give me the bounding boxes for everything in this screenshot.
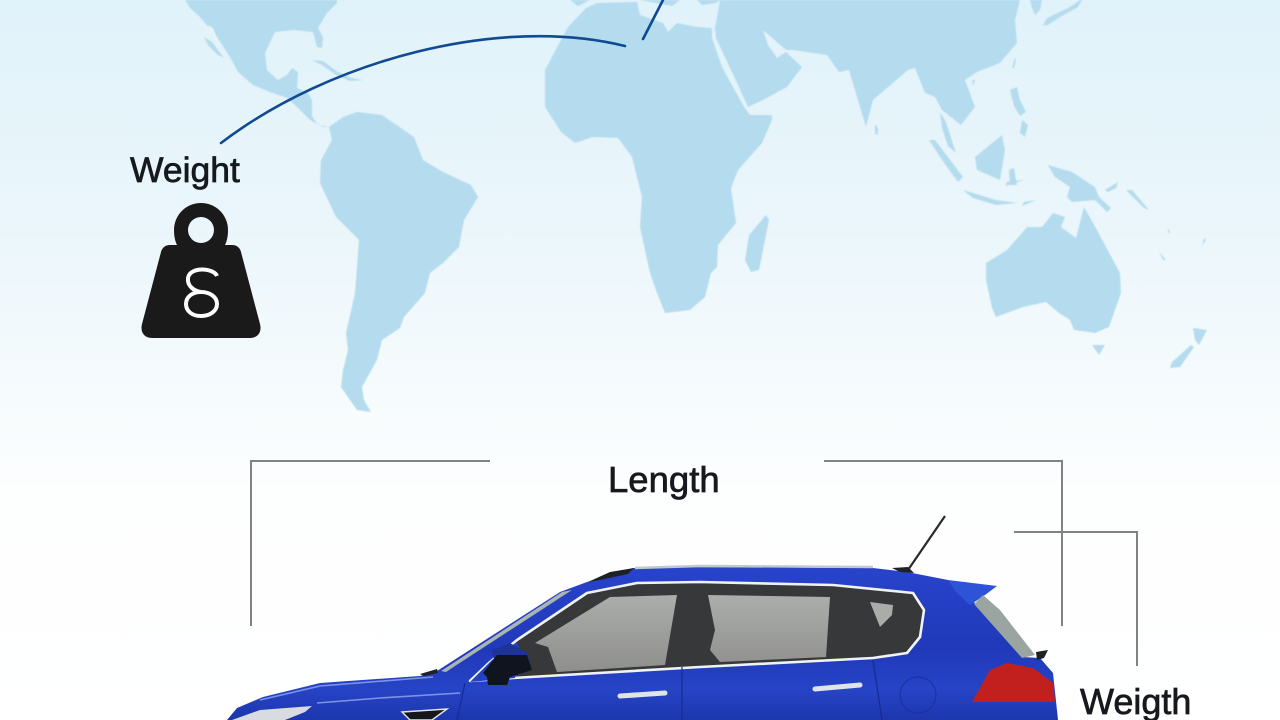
gulf of california highlight <box>208 25 222 50</box>
north america <box>185 0 337 127</box>
antenna base <box>892 567 914 573</box>
mirror housing <box>483 655 532 685</box>
antenna <box>908 516 945 570</box>
fender vent <box>402 709 447 720</box>
quarter window glass <box>870 602 893 627</box>
weight bracket <box>1014 532 1137 666</box>
hood highlights <box>260 677 460 703</box>
length bracket left <box>251 461 490 626</box>
eurasia <box>715 0 1020 127</box>
madagascar <box>745 215 769 272</box>
window frame and tint <box>470 582 924 681</box>
door handles <box>620 685 860 696</box>
southeast asian islands <box>875 58 1036 206</box>
front window glass <box>535 595 677 672</box>
mirror triangle blue <box>470 642 520 682</box>
mirror cap <box>492 643 530 664</box>
front door handle <box>620 693 665 696</box>
fuel cap <box>900 677 936 713</box>
length bracket right <box>824 461 1062 626</box>
heading: length: Length <box>608 459 720 500</box>
malay peninsula <box>940 112 956 153</box>
blue car <box>227 516 1058 720</box>
tasmania <box>1092 345 1105 355</box>
africa <box>545 2 772 313</box>
japan and korea <box>1030 0 1082 25</box>
heading: weight: Weight <box>130 150 240 190</box>
roof rail dark section <box>588 568 634 582</box>
middle window glass <box>708 595 830 662</box>
rear wiper <box>1036 650 1048 660</box>
roof rail silver section <box>635 566 873 568</box>
rear door handle <box>815 685 860 689</box>
headlight <box>232 706 312 720</box>
rear window <box>974 595 1035 658</box>
south america <box>320 112 478 412</box>
roof rail <box>588 566 873 582</box>
caribbean islands <box>312 60 363 81</box>
door seams <box>457 660 882 720</box>
new zealand <box>1170 328 1207 368</box>
side mirror <box>483 643 532 685</box>
europe fragments <box>570 0 720 6</box>
route line toward europe <box>643 0 663 39</box>
route arc from weight label <box>221 36 625 143</box>
spoiler <box>948 580 997 605</box>
new guinea <box>1048 165 1111 212</box>
baja california <box>204 37 224 58</box>
pacific islands <box>1105 182 1206 260</box>
world map <box>185 0 1207 412</box>
windshield <box>441 590 572 672</box>
car body <box>227 567 1058 720</box>
tail light <box>972 663 1055 702</box>
wiper base <box>420 669 438 676</box>
australia <box>986 207 1121 333</box>
icon: weight <box>141 203 261 338</box>
